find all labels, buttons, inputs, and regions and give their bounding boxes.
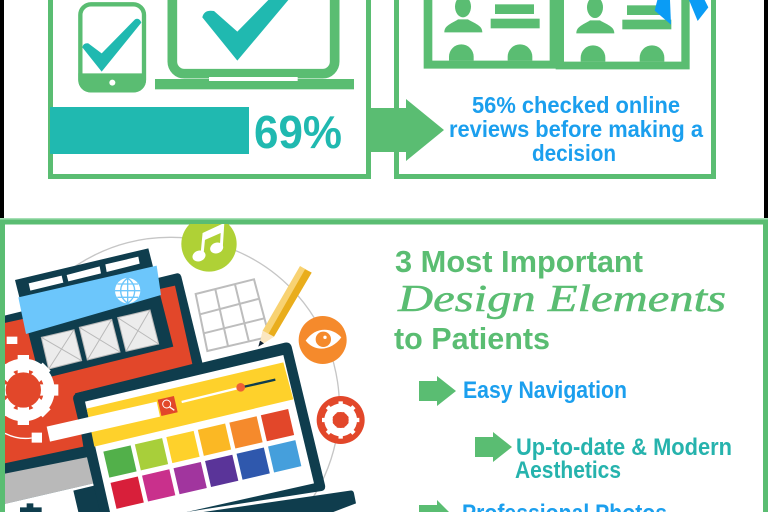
- list item: modern aesthetics: Up-to-date & Modern: [516, 434, 732, 461]
- stat: 69%: 69%: [254, 106, 342, 158]
- icon: laptop with check mark: [155, 0, 354, 89]
- large gear: [0, 337, 58, 443]
- heading: 3 most important design elements: [394, 244, 726, 356]
- wireframe browser: [15, 248, 173, 379]
- text: reviews statistic: 56% checked online: [472, 92, 680, 118]
- arrow: between panels: [366, 99, 444, 161]
- text: reviews statistic: [449, 92, 703, 166]
- icon: review cards: [424, 0, 690, 69]
- panel: 56% online reviews: [396, 0, 714, 176]
- icon: music note: [181, 224, 237, 272]
- heading: 3 most important design elements: 3 Most Important: [395, 244, 643, 279]
- icon: grid: [196, 279, 269, 351]
- icon: phone with check mark: [78, 4, 146, 92]
- heading: 3 most important design elements: Design Elements: [397, 278, 726, 320]
- icon: blue ribbon: [655, 0, 708, 25]
- icon: eye: [299, 316, 347, 364]
- colour swatches: [103, 409, 301, 509]
- back window: [0, 273, 203, 467]
- lower grey window: [5, 454, 100, 512]
- list item: easy navigation: Easy Navigation: [463, 377, 627, 404]
- list item: modern aesthetics: [475, 432, 732, 484]
- progress bar: [50, 107, 249, 154]
- text: reviews statistic: reviews before making a: [449, 116, 703, 142]
- heading: 3 most important design elements: to Patients: [394, 321, 550, 356]
- icon: settings gear: [317, 396, 365, 444]
- list item: modern aesthetics: Aesthetics: [515, 457, 621, 484]
- icon: pencil: [258, 266, 312, 347]
- laptop screen: [47, 342, 356, 512]
- illustration: web design tools: [0, 216, 365, 512]
- panel: design elements: [0, 218, 768, 512]
- text: reviews statistic: decision: [532, 140, 616, 166]
- list item: easy navigation: [419, 376, 627, 406]
- panel: 69% device statistic: [50, 0, 368, 176]
